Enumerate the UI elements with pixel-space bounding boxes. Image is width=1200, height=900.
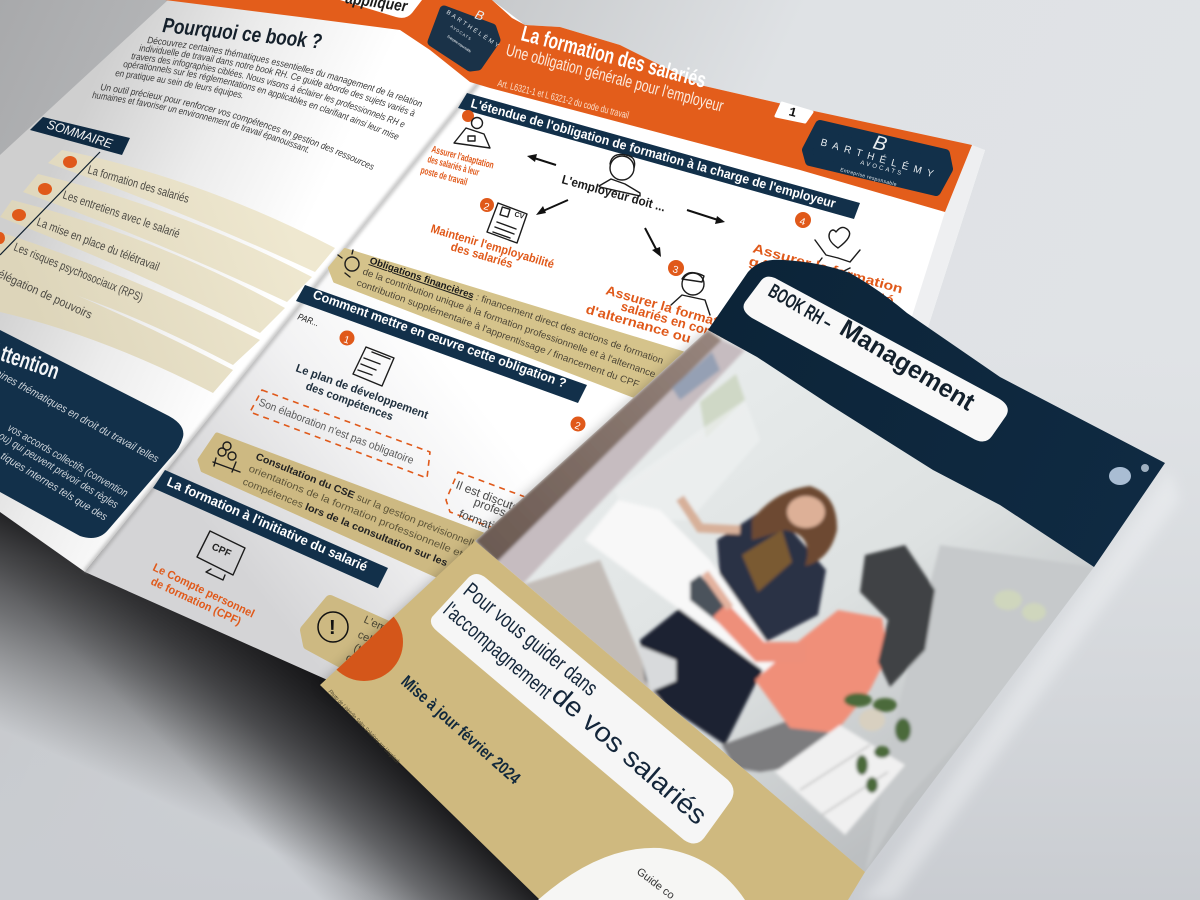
callout: consultation du CSE (200, 435, 510, 590)
step 1 (419, 110, 495, 188)
block: plan de développement: 1 (342, 334, 351, 347)
logo: right page: B (871, 132, 889, 156)
block: plan de développement: des compétences (304, 381, 395, 423)
floor and room (524, 559, 666, 703)
callout: warning: ! (329, 617, 336, 639)
window (700, 374, 745, 438)
brochure cover (320, 260, 1165, 900)
block: CPF: CPF (210, 542, 233, 560)
woman 1 torso (717, 505, 826, 645)
step 3: salariés en contrat (619, 298, 734, 345)
step 2: des salariés (449, 239, 515, 271)
spine shadow (85, 25, 525, 572)
section band: comment mettre en oeuvre: Comment mettre en œuvre cette obligation ? (311, 287, 569, 391)
section band: étendue de l'obligation: L'étendue de l'obligation de formation à la charge de l'employeur (469, 95, 837, 211)
step 1: Assurer l'adaptation (430, 144, 495, 171)
table (586, 500, 776, 673)
tab: book RH management: Management (835, 314, 980, 417)
icon: CPF monitor (197, 531, 245, 580)
lower right wall (865, 545, 1094, 872)
step 3: d'alternance ou ... (584, 301, 708, 350)
white subtitle tab: de vos salariés (546, 680, 713, 830)
heading: sommaire: SOMMAIRE (45, 117, 115, 151)
tab: book RH management (744, 277, 1008, 442)
white subtitle tab: l'accompagnement (439, 598, 556, 704)
step 2 (429, 198, 556, 271)
text block: introduction: en pratique au sein de leurs équipes. (116, 71, 242, 98)
logo: left page: BARTHÉLÉMY (445, 9, 500, 49)
door frame (475, 330, 722, 562)
logo: left page: Entreprise responsable (446, 35, 472, 54)
dashed note: Son élaboration n'est pas obligatoire (257, 397, 415, 467)
text block: introduction: opérationnels sur les réglementations en applicables en clarifiant ainsi leur mise (124, 61, 399, 140)
update date: Mise à jour février 2024 (397, 672, 524, 788)
logo: right page (807, 125, 948, 191)
text block: introduction: Découvrez certaines thématiques essentielles du management de la relation (147, 36, 422, 107)
glass panel (673, 402, 742, 518)
panel: cover photo (470, 320, 1110, 880)
step 1: poste de travail (419, 165, 469, 188)
cover shadow on pages (320, 330, 720, 700)
callout: warning: (to (352, 642, 368, 658)
woman 2 hair (860, 545, 935, 687)
diagram: l'employeur doit (419, 110, 905, 350)
step 4: 4 (798, 216, 807, 228)
woman 1 legs (640, 600, 765, 745)
callout: consultation du CSE: compétences lors de la consultation sur les (241, 477, 449, 569)
block: plan de développement (250, 330, 430, 478)
photo credit: Photo de LinkedIn Sales Solutions sur Unsplash (327, 689, 401, 766)
panel: cover beige footer (320, 541, 865, 900)
step 2: Maintenir l'employabilité (429, 221, 556, 271)
callout: consultation du CSE: Consultation du CSE sur la gestion prévisionnelle (254, 452, 481, 552)
cabinet (775, 725, 905, 835)
text: par: PAR... (296, 311, 320, 328)
hair and face (752, 486, 837, 566)
block: step 2 discussion: 2 (573, 420, 582, 433)
block: step 2 discussion (446, 416, 586, 545)
callout: consultation du CSE: orientations de la formation professionnelle et (247, 464, 464, 560)
text block: introduction: Un outil précieux pour renforcer vos compétences en gestion des ressources (100, 84, 374, 170)
callout: warning: cel (356, 629, 374, 646)
icon: people (213, 442, 240, 472)
icon: checklist (353, 347, 394, 386)
callout: obligations financières: de la contribution unique à la formation professionnelle et à l'alternance (361, 266, 657, 380)
panel: right page (85, 25, 985, 690)
step 4: Assurer la formation (751, 240, 905, 296)
panel: left page (0, 0, 525, 572)
panel: attention: tiques internes tels que des (0, 450, 110, 524)
logo: right page: AVOCATS (859, 160, 902, 177)
step 4 (747, 212, 905, 308)
header band: orange (165, 0, 972, 212)
step 3 (584, 260, 767, 350)
logo: left page (432, 7, 500, 67)
logo: right page: BARTHÉLÉMY (819, 135, 936, 180)
block: CPF (149, 531, 256, 628)
dots (1109, 464, 1149, 485)
step 1: des salariés à leur (426, 154, 480, 179)
list: sommaire entries: La formation des salariés (86, 162, 191, 206)
woman 2 trousers (722, 720, 835, 772)
block: step 2 discussion: formation (457, 507, 509, 538)
subheading: obligation: Une obligation générale pour l'employeur (504, 40, 726, 116)
white subtitle tab: Pour vous guider dans (459, 577, 603, 701)
callout: obligations financières (330, 250, 705, 402)
panel: cover navy header (708, 260, 1165, 567)
step 2: CV (513, 211, 525, 221)
callout: warning: o (344, 652, 354, 665)
list: sommaire entries: Les risques psychosociaux (RPS) (12, 240, 145, 304)
logo: right page: Entreprise responsable (839, 167, 897, 188)
heading: la formation des salariés: La formation des salariés (519, 21, 709, 93)
orange shape (336, 616, 403, 681)
heading: sommaire (30, 117, 130, 155)
panel: attention (0, 330, 183, 538)
page number tab (776, 103, 812, 122)
text block: introduction: individuelle de travail dans notre book RH. Ce guide aborde des sujets variés à (139, 44, 415, 116)
heading: Pourquoi ce book: Pourquoi ce book ? (161, 14, 323, 54)
icon: employer (599, 154, 640, 196)
text: legal reference: Art. L6321-1 et L 6321-2 du code du travail (496, 78, 630, 122)
text block: introduction: humaines et favoriser un environnement de travail épanouissant. (92, 91, 308, 153)
white blob (538, 848, 745, 900)
woman 2 jacket (755, 610, 888, 733)
step 3: 3 (671, 264, 680, 276)
callout: warning: L'em (362, 614, 388, 635)
tab: book RH management: BOOK RH – (764, 280, 836, 334)
callout: obligations financières: Obligations financières : financement direct des actions de formation (368, 255, 665, 367)
callout: warning (305, 600, 420, 665)
section band: formation à l'initiative du salarié: La formation à l'initiative du salarié (165, 474, 370, 574)
plant (844, 693, 911, 793)
block: CPF: de formation (CPF) (149, 576, 243, 628)
step 2: 2 (482, 201, 491, 213)
list: sommaire entries: Les entretiens avec le salarié (61, 188, 182, 241)
list: sommaire entries (0, 150, 335, 393)
open booklet (0, 0, 985, 680)
callout: obligations financières: contribution supplémentaire à l'apprentissage / financement du CPF (355, 277, 641, 390)
step 3: Assurer la formation des (604, 282, 767, 342)
logo: left page: AVOCATS (449, 24, 472, 41)
text block: introduction (92, 36, 422, 170)
block: CPF: Le Compte personnel (151, 562, 256, 620)
step 4: générale de qualité (747, 253, 896, 308)
panel: attention: vos accords collectifs (convention (6, 422, 130, 500)
label: l'employeur doit: L'employeur doit ... (560, 172, 667, 214)
block: step 2 discussion: professionnel (472, 495, 544, 533)
arm and hand (680, 498, 740, 530)
panel: attention: ou) qui peuvent prévoir des règles (0, 430, 120, 511)
logo: left page: B (473, 7, 487, 24)
page number tab: 1 (787, 104, 799, 121)
white subtitle tab (431, 574, 734, 844)
tablet (688, 574, 726, 622)
block: step 2 discussion: Il est discuté (454, 478, 522, 515)
list: sommaire entries: La mise en place du télétravail (35, 215, 161, 274)
arrows (527, 154, 725, 257)
block: plan de développement: Le plan de développement (294, 363, 430, 422)
